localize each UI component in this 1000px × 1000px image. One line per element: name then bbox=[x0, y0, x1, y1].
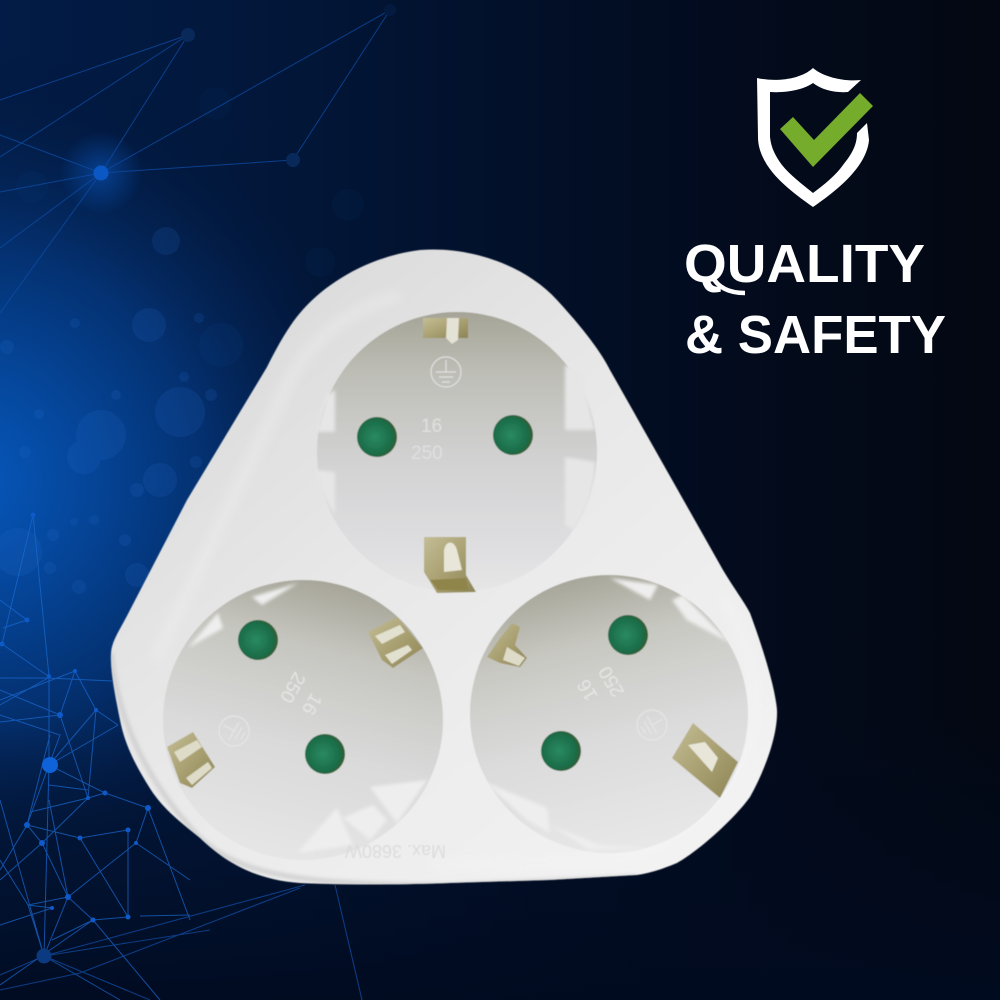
socket well bbox=[317, 312, 597, 592]
earth symbol bbox=[214, 711, 254, 751]
left contact bbox=[167, 732, 215, 788]
heading line 1: QUALITY bbox=[684, 234, 925, 294]
lower pin hole bbox=[305, 734, 345, 774]
triple socket adapter bbox=[111, 249, 777, 885]
rating marking: 250 bbox=[275, 668, 309, 706]
side notches bbox=[317, 365, 595, 530]
rating marking: 16 bbox=[297, 689, 326, 718]
earth symbol bbox=[431, 357, 461, 387]
right contact bbox=[368, 617, 423, 668]
tabs bbox=[485, 578, 730, 850]
right socket bbox=[470, 575, 748, 853]
rating marking: 16 bbox=[574, 675, 602, 704]
network mesh lower left bbox=[0, 515, 190, 1000]
tabs bbox=[188, 583, 427, 853]
upper pin hole bbox=[238, 620, 278, 660]
bokeh particles bbox=[0, 87, 364, 594]
power rating marking: Max. 3680W bbox=[345, 841, 446, 861]
long network rays lower left bbox=[0, 885, 362, 1000]
left socket bbox=[163, 580, 443, 860]
socket well bbox=[470, 575, 748, 853]
shield outline bbox=[757, 68, 869, 207]
bottom contact bbox=[424, 537, 476, 593]
heading line 2: & SAFETY bbox=[685, 305, 946, 365]
rating marking: 250 bbox=[411, 443, 443, 464]
earth symbol bbox=[632, 705, 672, 745]
green check mark bbox=[780, 93, 873, 167]
Q swash bbox=[712, 276, 745, 293]
plug body bbox=[111, 249, 777, 884]
rating marking bbox=[411, 416, 443, 464]
rating marking bbox=[573, 662, 629, 713]
socket well bbox=[163, 580, 443, 860]
right contact bbox=[672, 723, 738, 798]
rating marking: 250 bbox=[595, 662, 629, 700]
shield icon bbox=[757, 68, 873, 207]
network nodes lower left bbox=[0, 512, 151, 964]
upper pin hole bbox=[608, 615, 648, 655]
rim shading bbox=[111, 653, 635, 884]
glow behind bright node bbox=[59, 131, 143, 215]
left contact bbox=[487, 623, 527, 667]
left pin hole bbox=[357, 417, 397, 457]
network lines upper left bbox=[0, 10, 390, 313]
top socket bbox=[317, 312, 597, 593]
rating marking: 16 bbox=[421, 416, 442, 437]
network nodes upper left bbox=[94, 4, 396, 180]
right pin hole bbox=[493, 415, 533, 455]
rating marking bbox=[275, 668, 331, 719]
lower pin hole bbox=[541, 731, 581, 771]
top contact bbox=[423, 318, 468, 344]
heading: quality and safety bbox=[684, 234, 946, 365]
